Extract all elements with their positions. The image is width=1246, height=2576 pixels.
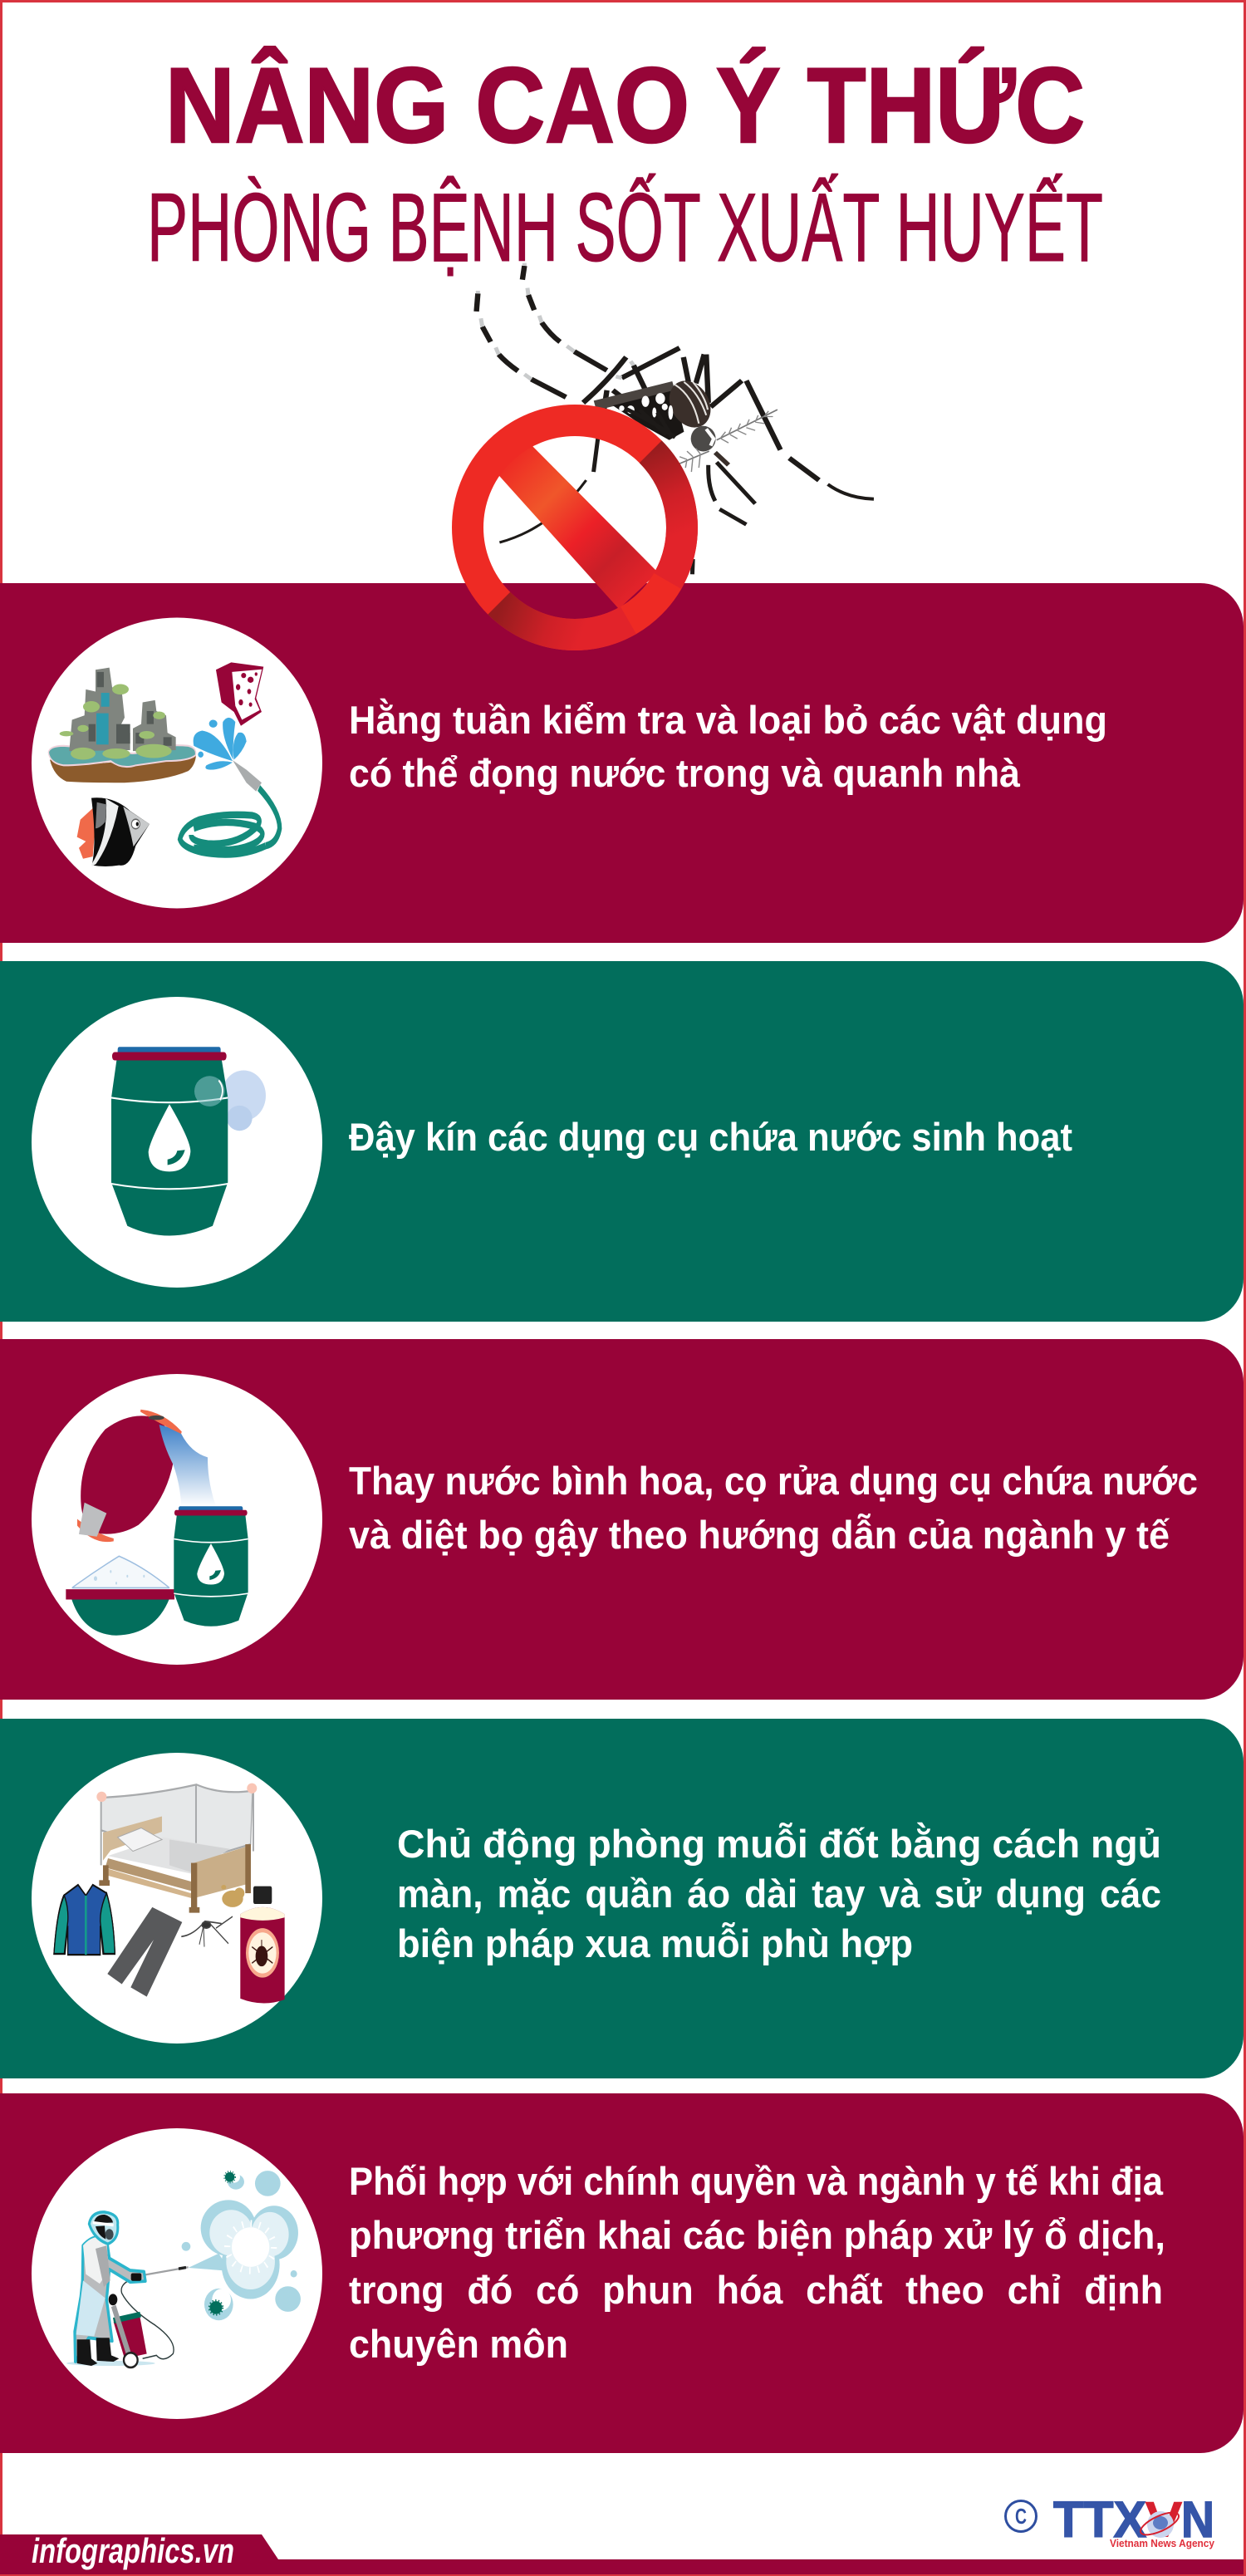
- step 4: circle with icons: [32, 1753, 1161, 2044]
- spray wand: [145, 2267, 189, 2274]
- title: NÂNG CAO Ý THỨC: [165, 46, 1085, 165]
- panel: step 2 background: [0, 961, 1244, 1322]
- repellent can: [240, 1907, 285, 2004]
- hose: [233, 760, 262, 792]
- text: [349, 1459, 1198, 1557]
- panel: step 3 background: [0, 1339, 1244, 1700]
- panel: step 4 background: [0, 1719, 1244, 2078]
- text: Thay nước bình hoa, cọ rửa dụng cụ chứa nước: [349, 1459, 1198, 1503]
- panel: step 5 background: [0, 2093, 1244, 2453]
- step 5: circle with icons: [32, 2128, 1165, 2419]
- small mosquito: [181, 1916, 233, 1947]
- cart: [114, 2316, 147, 2358]
- text line 2: màn, mặc quần áo dài tay và sử dụng các: [397, 1872, 1161, 1916]
- logo: TTXVN: [1005, 2491, 1215, 2549]
- logo: TTXVN: TTX: [1053, 2491, 1146, 2548]
- text: [349, 2159, 1165, 2366]
- logo: TTXVN: C: [1015, 2504, 1027, 2529]
- text line 2: phương triển khai các biện pháp xử lý ổ dịch,: [349, 2213, 1165, 2257]
- logo: TTXVN: V: [1145, 2491, 1183, 2548]
- icon: prohibition sign: [468, 420, 682, 635]
- trousers: [107, 1907, 182, 1997]
- footer strip: [0, 2534, 1244, 2574]
- text: Hằng tuần kiểm tra và loại bỏ các vật dụng: [349, 698, 1107, 742]
- hose: [121, 2279, 174, 2359]
- text: [349, 698, 1107, 795]
- text line 3: biện pháp xua muỗi phù hợp: [397, 1921, 913, 1965]
- step 3: circle with icons: [32, 1374, 1198, 1665]
- text: Đậy kín các dụng cụ chứa nước sinh hoạt: [349, 1115, 1072, 1159]
- step 1: circle with icons: [32, 618, 1107, 909]
- text: Chủ động phòng muỗi đốt bằng cách ngủ: [397, 1822, 1161, 1866]
- logo: TTXVN: N: [1181, 2491, 1214, 2548]
- icons: disinfecting worker and spray cloud: [66, 2171, 301, 2367]
- ground: [66, 2361, 155, 2366]
- footer website text: infographics.vn: [32, 2531, 234, 2570]
- mosquito wing spots: [655, 393, 665, 404]
- text: [397, 1822, 1161, 1965]
- text: Phối hợp với chính quyền và ngành y tế khi địa: [349, 2159, 1164, 2203]
- spray: [221, 1885, 244, 1907]
- icon: water barrel with bubbles: [111, 1047, 266, 1236]
- icons: vase, water stream, barrel, bowl: [66, 1411, 248, 1636]
- spray cloud: [189, 2200, 298, 2299]
- worker: [75, 2237, 145, 2362]
- title: [147, 46, 1103, 282]
- icons: rock garden, sponge, fish, hose: [48, 662, 280, 866]
- icons: bed net, jacket, trousers, mosquito, repellent: [54, 1784, 285, 2004]
- virus: [209, 2171, 235, 2315]
- sponge: [216, 662, 263, 726]
- water splash: [194, 718, 247, 770]
- rocks: [69, 668, 176, 751]
- panel: step 1 background: [0, 583, 1244, 943]
- step 2: circle with icons: [32, 997, 1072, 1288]
- jacket: [54, 1885, 115, 1955]
- text line 2: và diệt bọ gậy theo hướng dẫn của ngành y tế: [349, 1513, 1170, 1557]
- logo: TTXVN: Vietnam News Agency: [1110, 2537, 1215, 2549]
- icon: mosquito: [477, 263, 874, 574]
- text line 3: trong đó có phun hóa chất theo chỉ định: [349, 2268, 1163, 2312]
- fish: [77, 804, 97, 859]
- text line 2: có thể đọng nước trong và quanh nhà: [349, 751, 1021, 795]
- text line 4: chuyên môn: [349, 2322, 568, 2366]
